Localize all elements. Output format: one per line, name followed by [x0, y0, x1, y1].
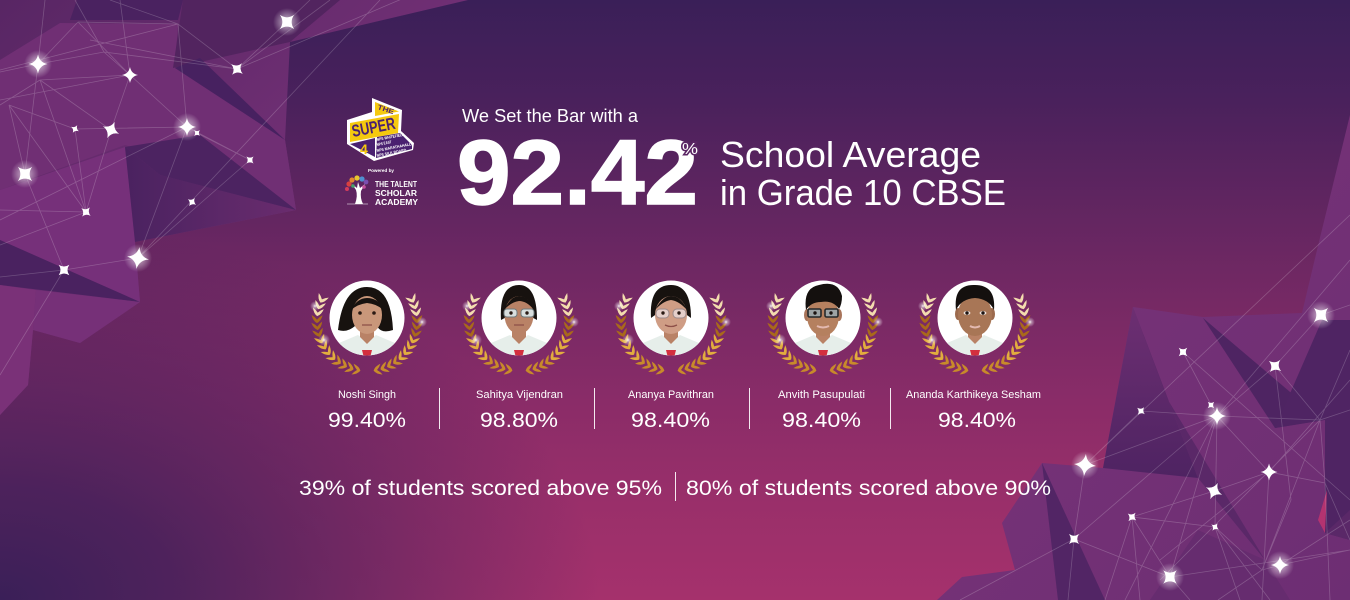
student: Sahitya Vijendran	[462, 280, 579, 432]
network lines left	[0, 0, 470, 375]
stat divider	[675, 472, 676, 501]
logo: The Super 4: NPS MARATHAHALLI	[376, 141, 413, 153]
big figure 92.42: 92.42	[457, 122, 698, 224]
academy wordmark	[375, 179, 418, 207]
wreath	[310, 293, 427, 376]
score: 98.40%	[782, 409, 861, 432]
headline line 2: in Grade 10 CBSE	[720, 172, 1006, 213]
divider 2	[594, 388, 595, 429]
name: Ananya Pavithran	[628, 389, 714, 401]
score: 98.40%	[631, 409, 710, 432]
wreath	[614, 293, 731, 376]
wreath	[462, 293, 579, 376]
logo: The Super 4: NPS WHITEFIELD	[376, 132, 405, 142]
sparkles right	[1064, 301, 1335, 591]
academy wordmark: ACADEMY	[375, 197, 418, 207]
stat: above 95%: 39% of students scored above 95%	[299, 477, 662, 500]
student: Noshi Singh	[310, 280, 427, 432]
logo: The Super 4: NPS SILK BOARD	[376, 147, 407, 158]
student: Anvith Pasupulati	[766, 280, 883, 432]
student: Ananya Pavithran	[614, 280, 731, 432]
network lines right	[960, 215, 1350, 600]
score: 99.40%	[328, 409, 406, 432]
score: 98.80%	[480, 409, 558, 432]
icon: talent tree	[345, 175, 368, 204]
bottom-right polygon cluster	[937, 115, 1350, 600]
name: Noshi Singh	[338, 389, 396, 401]
portrait	[938, 280, 1012, 358]
score: 98.40%	[938, 409, 1016, 432]
logo: The Super 4: SUPER	[350, 114, 397, 141]
powered by label: Powered by	[368, 168, 394, 173]
wreath	[918, 293, 1035, 376]
wreath	[766, 293, 883, 376]
sparkles left	[11, 8, 301, 281]
portrait	[482, 280, 556, 358]
headline line 1: School Average	[720, 134, 981, 175]
top-left polygon cluster	[0, 0, 468, 415]
kicker text: We Set the Bar with a	[462, 106, 639, 126]
stat: above 90%: 80% of students scored above 90%	[686, 477, 1051, 500]
name: Anvith Pasupulati	[778, 389, 865, 401]
percent sign: %	[682, 141, 698, 158]
divider 4	[890, 388, 891, 429]
logo: The Super 4: THE	[376, 104, 395, 116]
logo: The Super 4	[347, 98, 414, 161]
name: Ananda Karthikeya Sesham	[906, 389, 1041, 401]
divider 1	[439, 388, 440, 429]
logo: The Super 4: 4	[360, 141, 368, 157]
portrait	[330, 280, 404, 358]
portrait	[634, 280, 708, 358]
divider 3	[749, 388, 750, 429]
academy wordmark: THE TALENT	[375, 179, 418, 189]
academy wordmark: SCHOLAR	[375, 188, 418, 198]
name: Sahitya Vijendran	[476, 389, 563, 401]
student: Ananda Karthikeya Sesham	[906, 280, 1041, 432]
portrait	[786, 280, 860, 358]
logo: The Super 4: NPS EAST	[376, 139, 392, 147]
